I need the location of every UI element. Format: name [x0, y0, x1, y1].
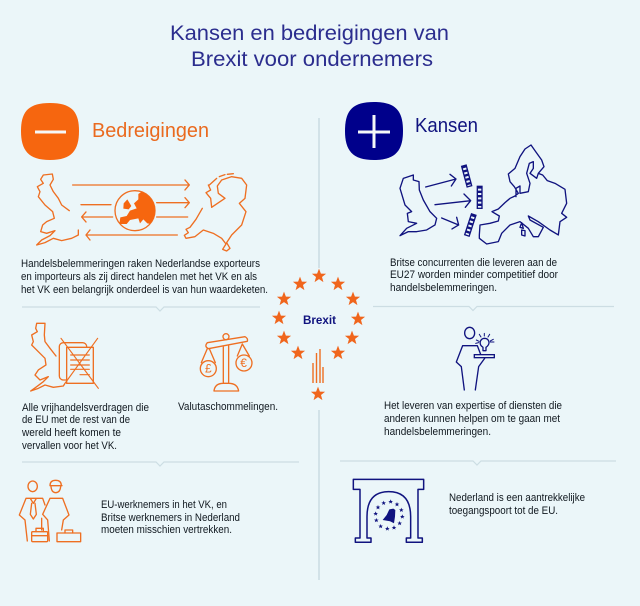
icon: plus badge	[345, 102, 403, 160]
label: brexit: Brexit	[303, 315, 336, 327]
panel: bedreigingen	[19, 103, 299, 542]
text: britse concurrenten: handelsbelemmeringen.	[390, 282, 497, 294]
heading: bedreigingen	[21, 103, 209, 160]
text: werknemers: moeten misschien vertrekken.	[101, 524, 232, 536]
text: vrijhandelsverdragen: Alle vrijhandelsverdragen die	[22, 402, 149, 414]
icon: currency scales: €	[240, 356, 247, 370]
heading: kansen	[345, 102, 478, 160]
text: britse concurrenten: Britse concurrenten die leveren aan de	[390, 257, 557, 269]
text: vrijhandelsverdragen: vervallen voor het VK.	[22, 440, 117, 452]
UK outline	[37, 174, 78, 245]
text: werknemers: EU-werknemers in het VK, en	[101, 499, 227, 511]
icon: trade between UK, Europe and Netherlands	[37, 174, 247, 251]
text: vrijhandelsverdragen: de EU met de rest van de	[22, 414, 130, 426]
icon: falling bars	[313, 349, 323, 383]
text: britse concurrenten: EU27 worden minder competitief door	[390, 269, 558, 281]
text: werknemers: Britse werknemers in Nederland	[101, 512, 240, 524]
icon: minus badge	[21, 103, 79, 160]
text: toegangspoort: toegangspoort tot de EU.	[449, 505, 558, 517]
globe with Europe	[115, 191, 157, 231]
text: handelsbelemmeringen	[21, 258, 268, 296]
title: Brexit voor ondernemers	[191, 48, 433, 71]
text: expertise: handelsbelemmeringen.	[384, 426, 491, 438]
title	[170, 22, 449, 71]
Netherlands outline	[184, 174, 247, 251]
text: handelsbelemmeringen: het VK een belangrijk onderdeel is van hun waardeketen.	[21, 284, 268, 296]
trade barriers	[462, 165, 482, 236]
text: valutaschommelingen: Valutaschommelingen.	[178, 401, 278, 413]
icon: gateway with Netherlands	[353, 479, 424, 542]
icon: UK exports blocked from EU	[400, 145, 567, 244]
arrows	[426, 174, 471, 229]
text: vrijhandelsverdragen: wereld heeft komen te	[21, 427, 121, 439]
text: expertise: anderen kunnen helpen om te gaan met	[384, 413, 560, 425]
heading: kansen: Kansen	[415, 115, 478, 137]
panel: kansen	[340, 102, 616, 542]
trade arrows	[73, 180, 189, 240]
text: handelsbelemmeringen: Handelsbelemmeringen raken Nederlandse exporteurs	[21, 258, 260, 270]
panel: brexit star circle	[272, 269, 365, 400]
agreement document crossed out	[59, 338, 98, 388]
icon: cancelled trade agreements	[31, 323, 98, 391]
text: expertise	[384, 400, 562, 438]
EU outline	[479, 145, 567, 244]
text: toegangspoort: Nederland is een aantrekkelijke	[449, 492, 585, 504]
icon: workers	[19, 480, 81, 542]
icon: currency scales	[200, 334, 252, 391]
UK outline small	[31, 323, 65, 391]
UK outline blue	[400, 175, 437, 236]
text: vrijhandelsverdragen	[21, 402, 149, 452]
text: toegangspoort	[449, 492, 585, 517]
icon: currency scales: £	[205, 362, 212, 376]
heading: bedreigingen: Bedreigingen	[92, 120, 209, 142]
centre divider lines	[318, 118, 320, 580]
text: britse concurrenten	[390, 257, 558, 294]
icon: presenter with light bulb	[456, 327, 494, 390]
text: expertise: Het leveren van expertise of diensten die	[384, 400, 562, 412]
title: Kansen en bedreigingen van	[170, 22, 449, 45]
text: werknemers	[101, 499, 240, 536]
text: handelsbelemmeringen: en importeurs als zij direct handelen met het VK en als	[21, 271, 257, 283]
